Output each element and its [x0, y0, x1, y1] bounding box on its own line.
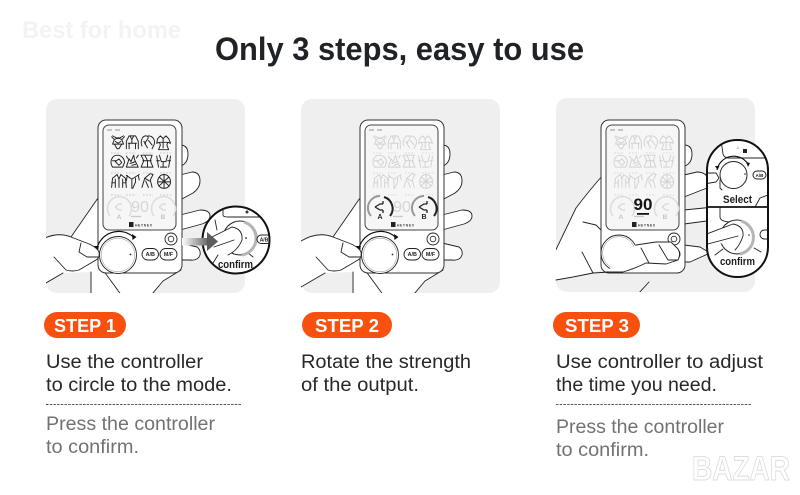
device, step 2: B — [421, 214, 427, 221]
device, step 3 — [601, 120, 685, 273]
device, step 2: A — [377, 214, 383, 221]
step 2 badge: STEP 2 — [315, 316, 379, 336]
thumb pressing power, step 3 — [556, 242, 680, 280]
step 2 badge — [302, 312, 392, 338]
device, step 1: 90 — [131, 199, 149, 216]
step 3 note: to confirm. — [556, 440, 649, 461]
hand behind device, step 3 — [550, 145, 714, 294]
device, step 1 — [94, 120, 182, 274]
callout: confirm circle — [202, 205, 273, 274]
callout: select and confirm pill — [704, 140, 774, 277]
step 3 main text: the time you need. — [556, 375, 717, 396]
callout: select and confirm pill: A — [737, 145, 740, 150]
hand behind device, step 2 — [301, 145, 472, 300]
step 1 note: to confirm. — [46, 437, 139, 458]
step 3 badge: STEP 3 — [565, 316, 629, 336]
device, step 1: A — [117, 214, 122, 221]
panel: step 2 illustration — [301, 99, 500, 300]
step 1 main text: to circle to the mode. — [46, 375, 232, 396]
device, step 3: B — [663, 214, 668, 221]
thumb, step 2 — [301, 235, 361, 271]
hand crease, step 3 — [583, 222, 601, 230]
callout: confirm circle: A/B — [260, 238, 269, 244]
step 3 note: Press the controller — [556, 417, 725, 438]
step 1 note: Press the controller — [46, 414, 216, 435]
step 2 main text: Rotate the strength — [301, 352, 471, 373]
panel: step 1 illustration — [39, 99, 273, 300]
step 1 badge: STEP 1 — [54, 316, 116, 336]
device, step 2 — [356, 120, 444, 274]
device, step 1: B — [161, 214, 166, 221]
device, step 3: A — [619, 214, 624, 221]
panel: step 3 illustration — [550, 98, 774, 294]
step 3 note — [556, 417, 725, 461]
step 2 main text: of the output. — [301, 375, 419, 396]
title: Only 3 steps, easy to use — [215, 31, 584, 67]
step 2 main text — [301, 352, 471, 396]
step 3 main text: Use controller to adjust — [556, 352, 764, 373]
callout: select and confirm pill: confirm — [720, 256, 755, 268]
callout: select and confirm pill: A/B — [756, 173, 764, 178]
step 3 main text — [556, 352, 764, 396]
thumb, step 1 — [39, 235, 99, 271]
step 3 badge — [553, 312, 640, 338]
step 1 note — [46, 414, 216, 458]
step 1 badge — [44, 312, 126, 338]
device, step 3: 90 — [634, 195, 652, 214]
callout: select and confirm pill: Select — [723, 194, 752, 206]
gauge A and B, active — [368, 196, 437, 216]
callout: confirm circle: confirm — [218, 259, 253, 271]
watermark: Best for home: Best for home — [22, 17, 181, 44]
step 1 main text: Use the controller — [46, 352, 204, 373]
hand behind device, step 1 — [39, 145, 210, 300]
device, step 2: 90 — [393, 199, 411, 216]
arrow to confirm detail — [182, 232, 218, 251]
step 1 main text — [46, 352, 232, 396]
